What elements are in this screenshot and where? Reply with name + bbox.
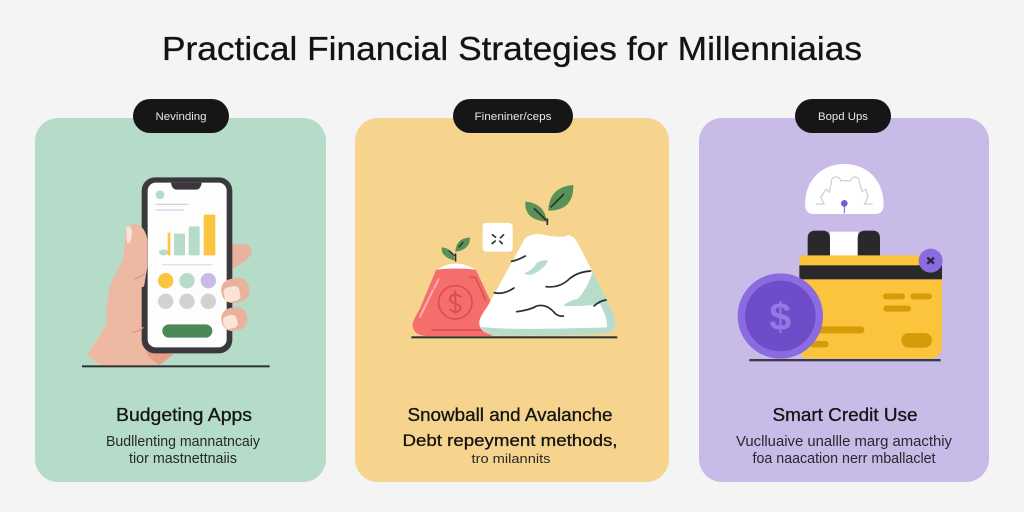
white mountain bbox=[479, 234, 616, 336]
card holder bbox=[808, 231, 880, 258]
small white tag bbox=[483, 223, 513, 252]
panel: budgeting apps bbox=[35, 99, 326, 482]
title: Practical Financial Strategies for Millenniaias bbox=[162, 30, 862, 67]
badge bbox=[919, 249, 943, 273]
heading: snowball and avalanche: Snowball and Avalanche bbox=[408, 405, 612, 425]
credit card bbox=[799, 255, 942, 359]
panel: snowball and avalanche bbox=[355, 99, 669, 482]
heading: smart credit use: Smart Credit Use bbox=[772, 405, 918, 425]
text: budgeting description: tior mastnettnaiis bbox=[129, 451, 237, 467]
text: debt repayment description bbox=[402, 431, 618, 466]
icon: hand holding phone bbox=[82, 177, 270, 367]
text: debt repayment description: tro milannits bbox=[472, 451, 551, 466]
coin: $ bbox=[769, 295, 791, 339]
text: debt repayment description: Debt repeyment methods, bbox=[402, 431, 618, 450]
text: budgeting description bbox=[106, 434, 261, 467]
panel: smart credit use bbox=[699, 99, 989, 482]
small sprout bbox=[442, 237, 470, 262]
icon: gauge, credit card and coin bbox=[738, 164, 943, 361]
red pile bbox=[413, 264, 492, 336]
icon: debt mountains bbox=[411, 185, 617, 338]
large sprout bbox=[525, 185, 573, 225]
tag: credit pill: Bopd Ups bbox=[818, 111, 869, 123]
text: budgeting description: Budllenting mannatncaiy bbox=[106, 434, 261, 450]
text: credit description: foa naacation nerr mballaclet bbox=[752, 451, 936, 467]
tag: repayment pill bbox=[453, 99, 573, 133]
tag: budgeting pill: Nevinding bbox=[156, 111, 206, 123]
credit score gauge bbox=[805, 164, 884, 214]
text: credit description bbox=[736, 434, 953, 467]
text: credit description: Vuclluaive unallle marg amacthiy bbox=[736, 434, 953, 450]
tag: credit pill bbox=[795, 99, 891, 133]
tag: repayment pill: Fineniner/ceps bbox=[474, 111, 552, 123]
coin bbox=[738, 273, 823, 359]
tag: budgeting pill bbox=[133, 99, 229, 133]
heading: budgeting apps: Budgeting Apps bbox=[116, 405, 252, 425]
